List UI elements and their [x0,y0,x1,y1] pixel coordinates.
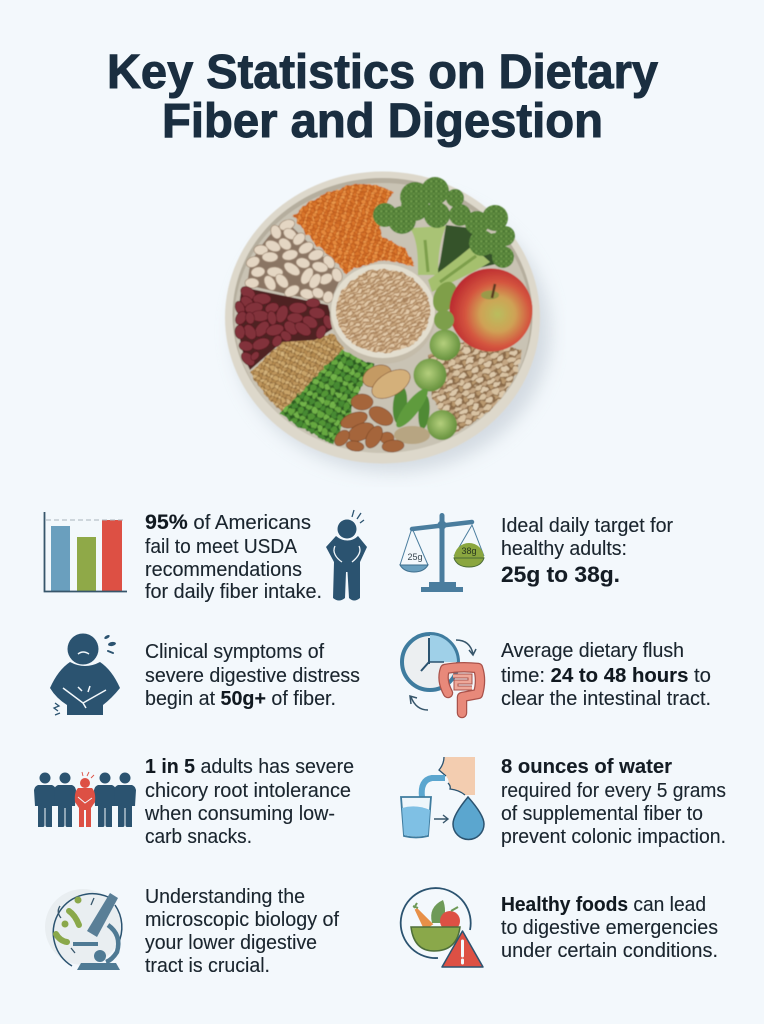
text: healthy foods [501,894,718,962]
stat: clinical symptoms [50,634,360,715]
icon: water glass, face and drop [401,757,484,840]
broccoli [373,177,515,292]
text: 95 percent of Americans: fail to meet USDA [145,536,298,558]
grains and legumes beds [250,184,522,444]
text: microscopic biology: Understanding the [145,886,305,908]
text: 8 ounces of water: required for every 5 grams [501,780,726,802]
brussels sprout lower [427,410,457,440]
stat: 8 ounces of water [401,756,726,848]
text: healthy foods: to digestive emergencies [501,917,718,939]
stat: 1 in 5 adults [34,756,354,848]
stat: flush time [402,634,711,713]
kidney beans [233,284,335,370]
text: flush time [501,640,711,710]
stat: microscopic biology [45,886,339,977]
green peas [280,350,375,444]
text: clinical symptoms: Clinical symptoms of [145,641,324,663]
text: clinical symptoms: severe digestive distress [145,665,360,687]
icon: five people [34,772,136,827]
text: 8 ounces of water: prevent colonic impaction. [501,826,726,848]
icon: clock and intestine [402,634,480,713]
almonds and peanuts [332,361,415,453]
stat: healthy foods [401,888,718,967]
text: 95 percent of Americans: for daily fiber intake. [145,581,322,603]
text: 1 in 5 adults [144,756,354,848]
icon: bent over person [326,510,367,600]
text: ideal daily target [501,515,673,587]
text: ideal daily target: Ideal daily target for [501,515,673,537]
text: 8 ounces of water [501,756,726,848]
title [107,46,658,148]
stat: 95 percent [44,510,367,603]
rice bowl [330,264,436,364]
icon: balance scale [400,513,484,592]
text: ideal daily target: 25g to 38g. [501,562,620,587]
apple [428,268,532,352]
text: 8 ounces of water: 8 ounces of water [501,756,672,778]
pale beans [245,218,344,306]
text: microscopic biology: microscopic biology of [145,909,339,931]
brussels sprouts [414,310,460,392]
icon: bar chart [44,512,127,592]
text: 8 ounces of water: of supplemental fiber to [501,803,703,825]
icon: balance scale: 25g [407,552,423,562]
text: microscopic biology: tract is crucial. [145,955,270,977]
icon: person with stomach pain [50,634,120,715]
text: 1 in 5 adults: carb snacks. [145,826,252,848]
text: healthy foods: Healthy foods can lead [501,894,706,916]
text: healthy foods: under certain conditions. [501,940,718,962]
orange lentils [293,184,415,273]
text: 95 percent of Americans: 95% of Americans [145,511,311,534]
text: ideal daily target: healthy adults: [501,538,627,560]
icon: food bowl with warning triangle [401,888,483,967]
text: flush time: time: 24 to 48 hours to [501,665,711,687]
text: 1 in 5 adults: when consuming low- [144,803,335,825]
title: Fiber and Digestion [162,95,603,148]
text: microscopic biology [145,886,339,977]
title: Key Statistics on Dietary [107,46,658,99]
icon: microscope and microbes [45,889,122,970]
oats [428,342,522,433]
icon: balance scale: 38g [461,546,477,556]
text: clinical symptoms: begin at 50g+ of fiber. [145,688,336,710]
text: flush time: clear the intestinal tract. [501,688,711,710]
text: 1 in 5 adults: 1 in 5 adults has severe [145,756,354,778]
text: flush time: Average dietary flush [501,640,684,662]
text: microscopic biology: your lower digestive [145,932,317,954]
tan lentils [250,333,345,412]
stat: daily target [400,513,673,592]
text: clinical symptoms [145,641,360,710]
text: 1 in 5 adults: chicory root intolerance [145,780,351,802]
text: 95 percent of Americans [145,511,322,603]
green beans [391,385,432,444]
food plate illustration [225,172,550,472]
text: 95 percent of Americans: recommendations [145,559,302,581]
